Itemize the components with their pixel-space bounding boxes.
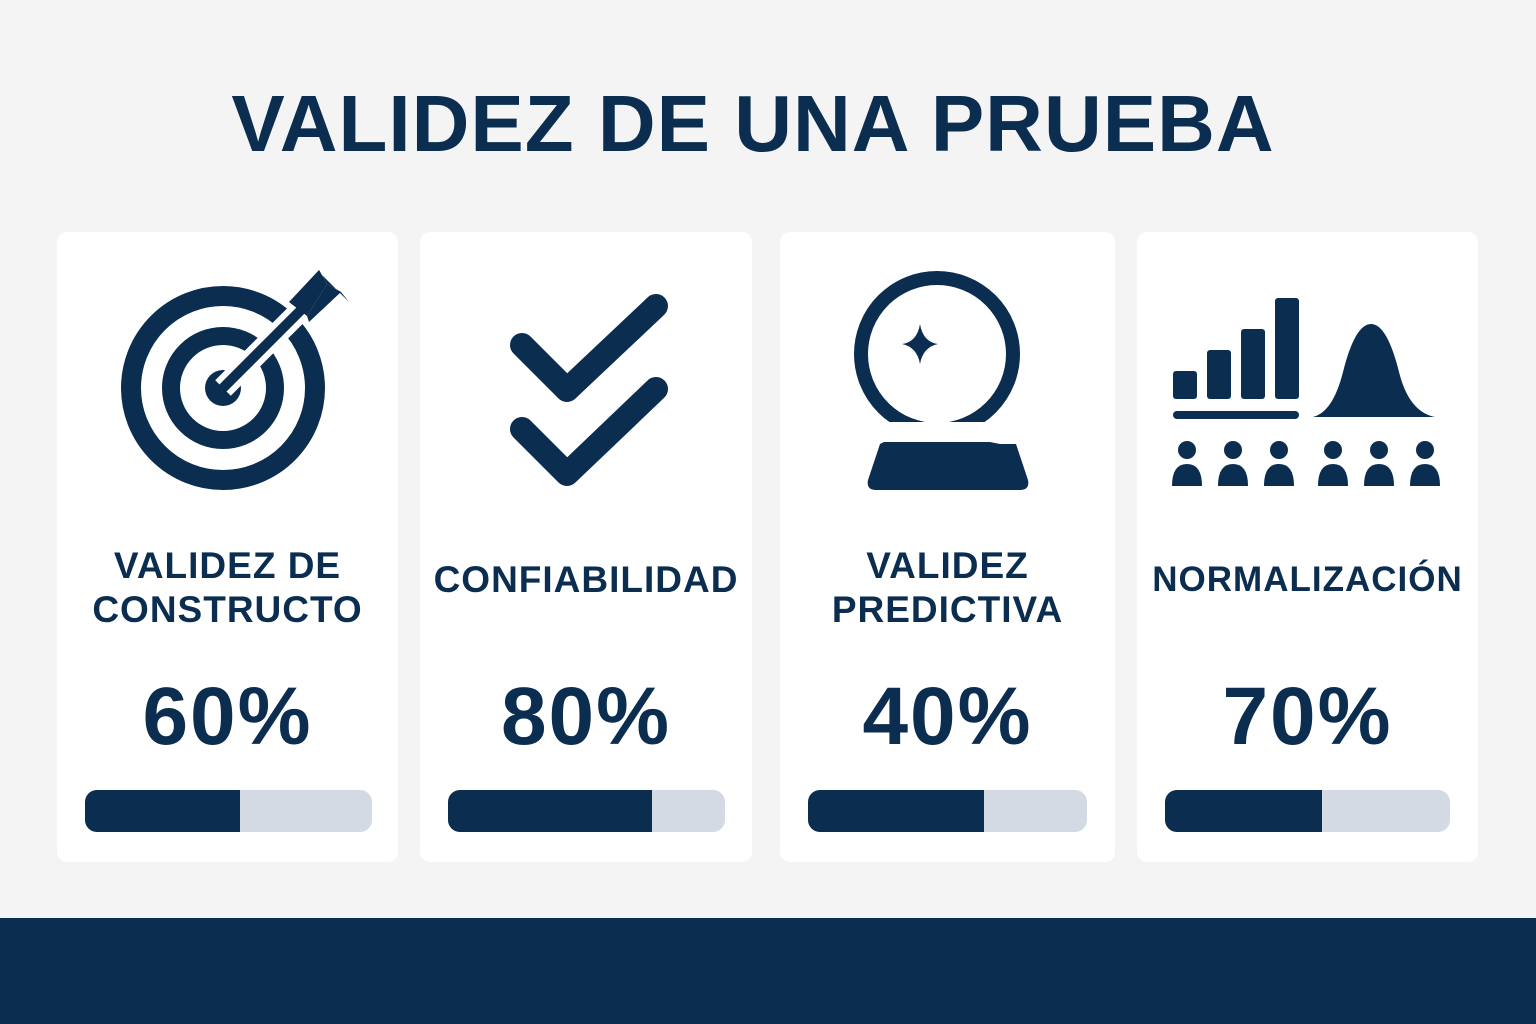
progress bar 40% (filled to mid) <box>808 790 1087 832</box>
label: PREDICTIVA <box>832 589 1063 630</box>
percentage: 80% <box>501 671 671 762</box>
progress bar 70% <box>1165 790 1450 832</box>
label: VALIDEZ <box>866 545 1029 586</box>
label: CONSTRUCTO <box>92 589 363 630</box>
panel: confiabilidad <box>420 232 752 862</box>
percentage: 60% <box>142 671 313 762</box>
progress bar 60% <box>85 790 372 832</box>
icon: double check <box>510 294 668 486</box>
panel: validez predictiva <box>780 232 1115 862</box>
label: NORMALIZACIÓN <box>1152 560 1463 599</box>
label: VALIDEZ DE <box>114 545 341 586</box>
footer bar <box>0 918 1536 1024</box>
panel: validez de constructo <box>57 232 398 862</box>
label: CONFIABILIDAD <box>434 559 738 600</box>
label <box>92 545 363 630</box>
percentage: 70% <box>1222 671 1393 762</box>
title: VALIDEZ DE UNA PRUEBA <box>231 79 1275 168</box>
icon: target with arrow <box>121 270 349 490</box>
percentage: 40% <box>862 671 1033 762</box>
label <box>832 545 1063 630</box>
icon: crystal ball <box>854 271 1028 490</box>
panel: normalizacion <box>1137 232 1478 862</box>
icon: bars, bell curve and people <box>1172 298 1440 486</box>
progress bar 80% <box>448 790 725 832</box>
